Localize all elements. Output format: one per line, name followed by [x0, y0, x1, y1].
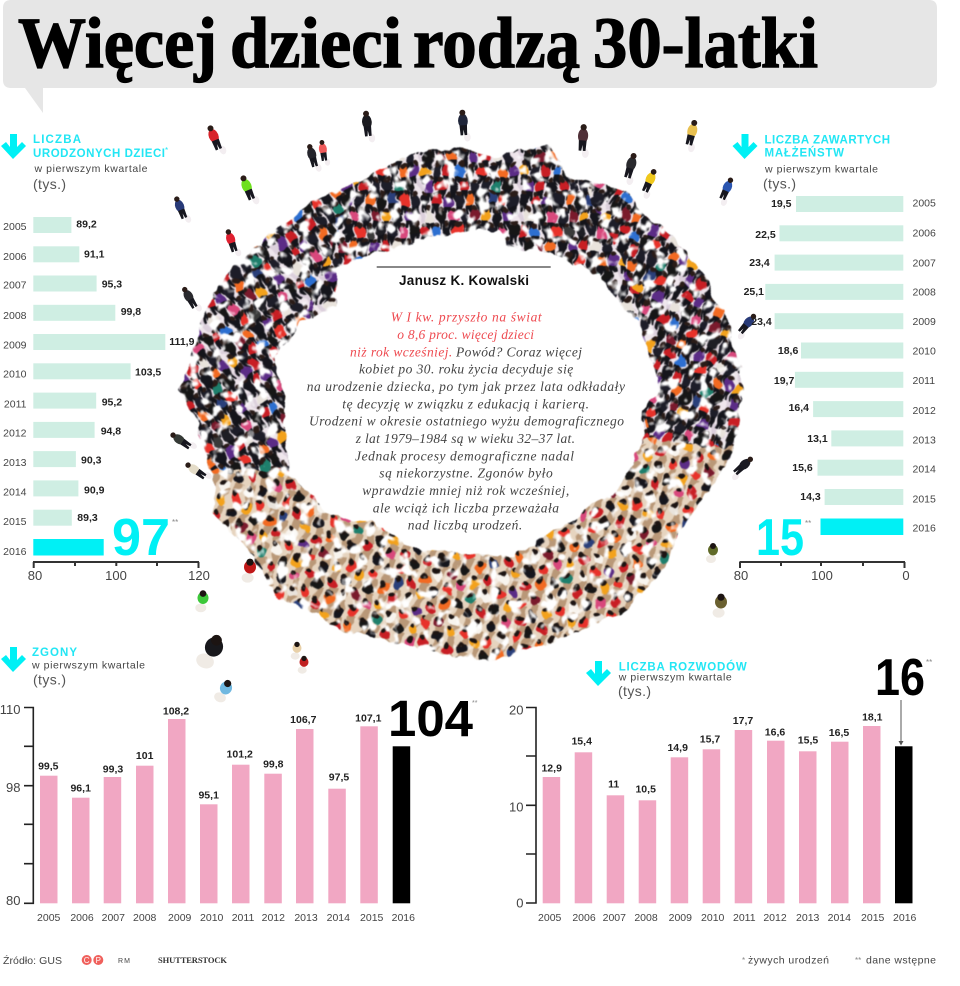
- births heading: URODZONYCH DZIECI: [33, 148, 165, 160]
- births years: 2008: [3, 310, 27, 322]
- divorces axis: [509, 702, 536, 911]
- footer source: [3, 954, 227, 967]
- births heading: w pierwszym kwartale: [34, 163, 148, 175]
- deaths values: 97,5: [329, 772, 349, 784]
- deaths years: 2008: [133, 912, 157, 924]
- divorces years: 2006: [572, 912, 596, 924]
- divorces years: 2016: [893, 912, 917, 924]
- arrow to 2016 bar: [898, 700, 904, 746]
- byline: Janusz K. Kowalski: [399, 273, 529, 288]
- article text: tę decyzję w związku z edukacją i karierą.: [342, 396, 589, 411]
- marriages values: [744, 198, 828, 503]
- marriages years: 2010: [912, 345, 936, 357]
- deaths heading: ZGONY: [32, 647, 77, 659]
- divorces axis: 0: [516, 896, 524, 911]
- deaths values: 95,1: [198, 789, 219, 801]
- marriages values: 23,4: [749, 257, 770, 269]
- marriages values: 13,1: [807, 433, 828, 445]
- divorces heading: w pierwszym kwartale: [618, 672, 732, 684]
- divorces big number: **: [926, 658, 932, 667]
- births values: 99,8: [121, 306, 141, 318]
- panel: divorces chart: [509, 649, 932, 924]
- births values: 95,2: [102, 396, 122, 408]
- title: 30-latki: [593, 3, 818, 83]
- divorces values: 14,9: [667, 742, 688, 754]
- deaths years: 2012: [262, 912, 285, 924]
- deaths years: 2011: [232, 912, 254, 924]
- divorces years: [538, 912, 917, 924]
- divorces big number: 16: [875, 649, 925, 707]
- panel: births chart: [1, 134, 210, 583]
- births values: 91,1: [84, 248, 105, 260]
- divorces values: 18,1: [862, 711, 883, 723]
- births heading: (tys.): [33, 176, 66, 192]
- deaths axis: 80: [6, 893, 20, 908]
- panel: center article: [307, 266, 625, 533]
- article text: ale wciąż ich liczba przeważała: [373, 500, 559, 515]
- divorces values: 10,5: [635, 784, 656, 796]
- icon: copyright marks: P: [96, 956, 101, 965]
- marriages values: 14,3: [800, 491, 821, 503]
- births years: 2015: [3, 516, 27, 528]
- panel: deaths chart: [0, 647, 478, 924]
- divorces axis: 20: [509, 702, 524, 717]
- births heading: [1, 134, 168, 192]
- deaths heading: (tys.): [33, 671, 66, 687]
- marriages years: 2007: [912, 258, 936, 270]
- births years: 2011: [4, 398, 27, 410]
- deaths years: 2014: [327, 912, 350, 924]
- births years: 2016: [3, 546, 27, 558]
- marriages axis: 80: [734, 568, 748, 583]
- deaths big number: 104: [388, 690, 474, 747]
- births years: 2007: [3, 280, 27, 292]
- deaths years: 2016: [392, 912, 415, 924]
- divorces years: 2009: [669, 912, 692, 924]
- article text: niż rok wcześniej.: [350, 344, 452, 359]
- divorces years: 2011: [733, 912, 756, 924]
- divorces values: 12,9: [541, 762, 562, 774]
- births years: 2010: [3, 368, 27, 380]
- births values: 94,8: [101, 425, 121, 437]
- divorces values: 16,6: [765, 727, 785, 739]
- footnotes: żywych urodzeń: [748, 954, 829, 966]
- births years: [3, 221, 27, 558]
- divorces years: 2012: [763, 912, 787, 924]
- marriages heading: MAŁŻEŃSTW: [764, 147, 844, 160]
- marriages heading: w pierwszym kwartale: [764, 164, 878, 176]
- births years: 2013: [3, 457, 27, 469]
- divorces heading: (tys.): [618, 683, 651, 699]
- births values: 89,2: [76, 218, 97, 230]
- footer source: Źródło: GUS: [3, 954, 62, 967]
- births axis: 80: [28, 568, 42, 583]
- deaths values: 99,3: [103, 763, 123, 775]
- marriages heading: LICZBA ZAWARTYCH: [764, 134, 890, 146]
- births values: 90,3: [81, 454, 102, 466]
- marriages years: 2009: [912, 316, 936, 328]
- divorces bars: [543, 726, 912, 903]
- divorces years: 2015: [861, 912, 885, 924]
- divorces years: 2013: [796, 912, 820, 924]
- deaths years: 2009: [168, 912, 192, 924]
- marriages big number: **: [805, 519, 811, 528]
- births years: 2014: [3, 487, 27, 499]
- divorces values: 15,4: [571, 735, 592, 747]
- deaths years: 2013: [294, 912, 318, 924]
- births values: 90,9: [84, 484, 105, 496]
- births years: 2005: [3, 221, 27, 233]
- deaths values: 99,8: [263, 758, 284, 770]
- deaths axis: 110: [0, 702, 20, 717]
- divorces years: 2008: [634, 912, 658, 924]
- deaths years: [37, 912, 415, 924]
- footnotes: **: [855, 956, 861, 965]
- crowd ring illustration: [168, 109, 770, 705]
- marriages years: 2014: [912, 464, 936, 476]
- deaths values: 107,1: [355, 712, 382, 724]
- article text: z lat 1979–1984 są w wieku 32–37 lat.: [355, 431, 575, 446]
- deaths years: 2006: [70, 912, 94, 924]
- marriages values: 23,4: [751, 316, 772, 328]
- article text: wprawdzie mniej niż rok wcześniej,: [362, 483, 569, 498]
- deaths years: 2005: [37, 912, 61, 924]
- icon: copyright marks: C: [84, 956, 90, 965]
- deaths values: 101: [136, 750, 154, 762]
- marriages bars: [765, 196, 903, 535]
- article text: na urodzenie dziecka, po tym jak przez lata odkładały: [307, 379, 625, 394]
- article text: [307, 310, 625, 533]
- deaths axis: [0, 702, 33, 908]
- title: Więcej: [18, 3, 217, 83]
- deaths values: 106,7: [290, 714, 317, 726]
- footnotes: *: [742, 956, 745, 965]
- marriages years: 2015: [912, 494, 936, 506]
- births values: 89,3: [77, 512, 98, 524]
- deaths years: 2007: [102, 912, 125, 924]
- births axis: 120: [188, 568, 210, 583]
- births big number: **: [172, 518, 178, 527]
- deaths values: 108,2: [163, 705, 189, 717]
- marriages axis: [734, 562, 910, 583]
- marriages values: 19,7: [774, 375, 794, 387]
- births heading: *: [165, 146, 168, 155]
- footnotes: dane wstępne: [866, 954, 936, 966]
- article text: o 8,6 proc. więcej dzieci: [397, 327, 534, 342]
- marriages years: [912, 198, 936, 535]
- births values: 111,9: [169, 336, 195, 348]
- divorces values: 16,5: [829, 727, 849, 739]
- marriages heading: (tys.): [763, 176, 796, 192]
- divorces values: 11: [608, 779, 619, 791]
- article text: kobiet po 30. roku życia decyduje się: [359, 362, 573, 377]
- article text: Powód? Coraz więcej: [455, 344, 582, 359]
- marriages years: 2013: [912, 434, 936, 446]
- article text: W I kw. przyszło na świat: [391, 310, 543, 325]
- marriages values: 25,1: [744, 286, 764, 298]
- title: dzieci: [230, 3, 402, 83]
- marriages big number: 15: [756, 509, 804, 567]
- marriages years: 2016: [912, 523, 936, 535]
- footer source: SHUTTERSTOCK: [158, 955, 227, 965]
- deaths heading: w pierwszym kwartale: [31, 659, 145, 671]
- deaths bars: [40, 719, 410, 903]
- deaths big number: **: [472, 700, 478, 707]
- births values: 103,5: [135, 366, 161, 378]
- marriages axis: 100: [811, 568, 833, 583]
- marriages years: 2012: [912, 405, 936, 417]
- marriages heading: [732, 134, 890, 192]
- divorces years: 2010: [701, 912, 725, 924]
- births values: [76, 218, 195, 524]
- article text: Jednak procesy demograficzne nadal: [355, 448, 574, 463]
- deaths values: 99,5: [38, 760, 59, 772]
- marriages values: 22,5: [755, 229, 776, 241]
- deaths axis: 98: [6, 780, 20, 795]
- births years: 2006: [3, 251, 27, 263]
- marriages values: 18,6: [778, 345, 798, 357]
- marriages values: 16,4: [789, 402, 809, 414]
- births years: 2009: [3, 339, 27, 351]
- title: rodzą: [413, 3, 580, 83]
- births values: 95,3: [102, 278, 122, 290]
- footer source: RM: [118, 958, 130, 965]
- article text: Urodzeni w okresie ostatniego wyżu demograficznego: [309, 414, 624, 429]
- divorces years: 2014: [828, 912, 851, 924]
- births axis: [28, 562, 210, 583]
- article text: nad liczbą urodzeń.: [408, 518, 522, 533]
- deaths heading: [1, 647, 145, 687]
- marriages years: 2011: [912, 375, 935, 387]
- divorces axis: 10: [509, 800, 524, 815]
- births axis: 100: [105, 568, 127, 583]
- births big number: 97: [112, 509, 170, 567]
- marriages years: 2006: [912, 228, 936, 240]
- rule above byline: [377, 266, 551, 268]
- marriages values: 19,5: [771, 198, 792, 210]
- divorces values: [541, 711, 883, 796]
- divorces values: 17,7: [733, 715, 753, 727]
- marriages years: 2005: [912, 198, 936, 210]
- births bars: [33, 217, 165, 556]
- births years: 2012: [3, 428, 27, 440]
- divorces heading: LICZBA ROZWODÓW: [619, 661, 747, 674]
- deaths years: 2010: [200, 912, 224, 924]
- panel: marriages chart: [732, 134, 936, 583]
- divorces years: 2005: [538, 912, 562, 924]
- marriages years: 2008: [912, 287, 936, 299]
- footnotes: [742, 954, 936, 966]
- marriages values: 15,6: [792, 462, 813, 474]
- title: [18, 3, 818, 83]
- divorces years: 2007: [603, 912, 626, 924]
- deaths values: 96,1: [70, 783, 91, 795]
- divorces heading: [586, 661, 747, 699]
- article text: są niekorzystne. Zgonów było: [379, 466, 553, 481]
- icon: copyright marks: [82, 955, 103, 965]
- divorces values: 15,7: [700, 733, 720, 745]
- births heading: LICZBA: [33, 134, 81, 146]
- deaths values: 101,2: [227, 749, 253, 761]
- deaths values: [38, 705, 382, 801]
- header banner: [3, 0, 937, 113]
- divorces values: 15,5: [798, 734, 818, 746]
- deaths years: 2015: [360, 912, 384, 924]
- marriages axis: 0: [902, 568, 910, 583]
